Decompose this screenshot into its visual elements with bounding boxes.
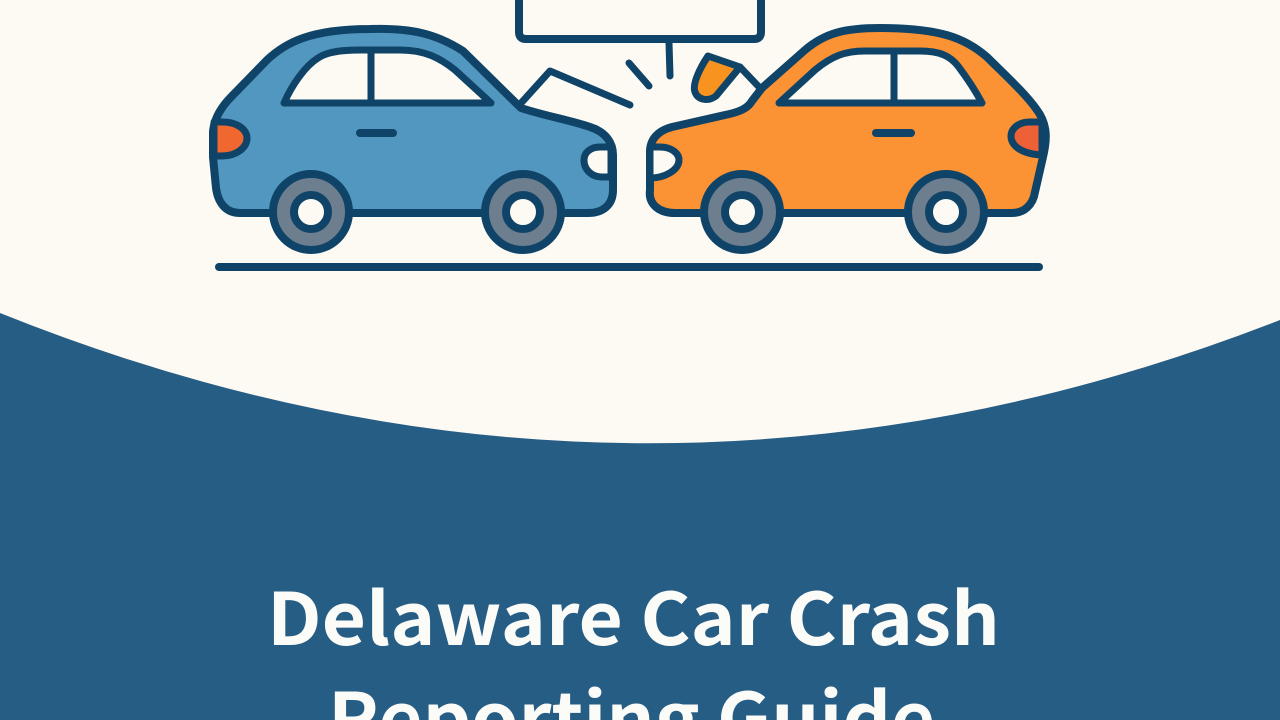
title <box>267 561 1000 720</box>
orange car <box>650 28 1046 250</box>
rear wheel <box>908 174 984 250</box>
blue curved title panel <box>0 313 1280 720</box>
headlight <box>650 147 679 178</box>
rear wheel <box>273 174 349 250</box>
front wheel <box>704 174 780 250</box>
impact spark lines <box>629 43 670 86</box>
front wheel <box>485 174 561 250</box>
tail light <box>214 122 247 156</box>
headlight <box>584 147 611 177</box>
blue car <box>213 29 630 250</box>
car body <box>650 28 1046 213</box>
broken hood fragment <box>740 67 760 88</box>
car body <box>213 29 613 213</box>
crumpled hood <box>522 71 630 105</box>
windows <box>284 50 491 103</box>
door handle <box>876 129 911 137</box>
door handle <box>360 129 393 137</box>
speech sign board <box>519 0 761 39</box>
windows <box>779 51 982 103</box>
tail light <box>1011 122 1042 155</box>
title: Delaware Car Crash <box>267 561 1000 666</box>
road line <box>219 263 1039 271</box>
